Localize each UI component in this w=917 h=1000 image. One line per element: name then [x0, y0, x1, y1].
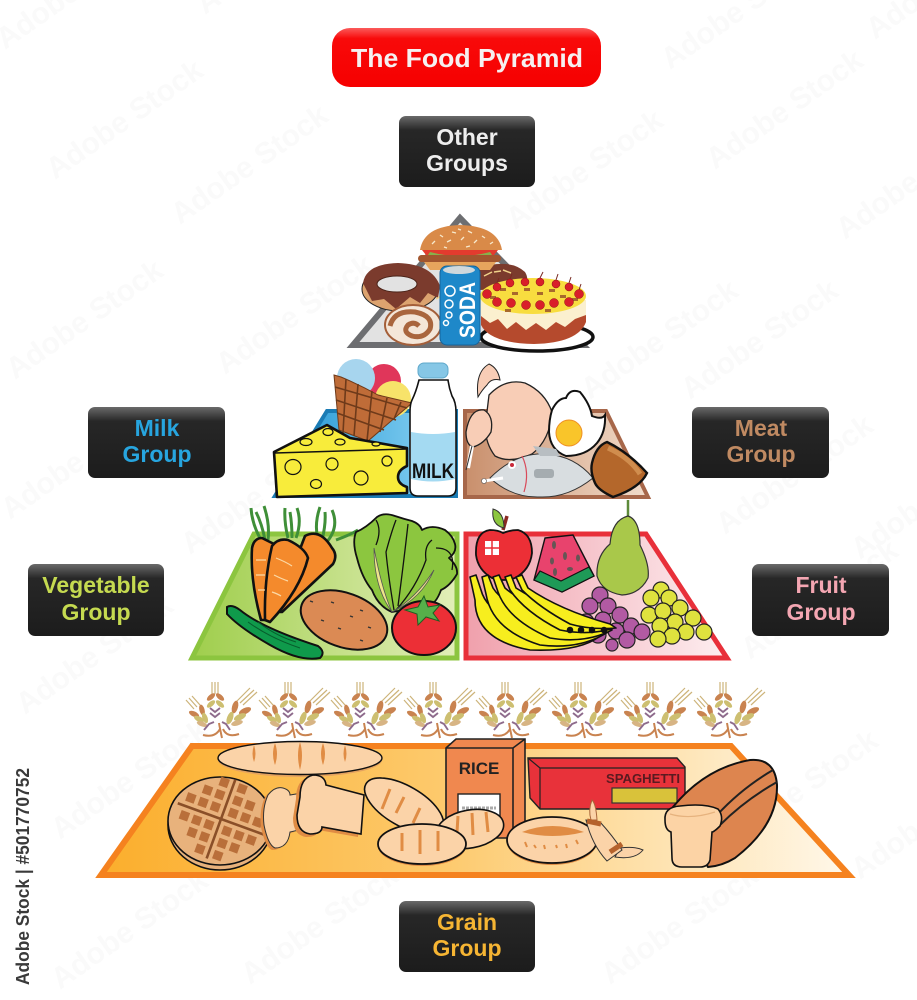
label: meat group: Meat — [735, 415, 788, 441]
stock watermark pattern: Adobe Stock — [45, 863, 214, 996]
panel: grain group — [101, 739, 849, 875]
label: milk group — [88, 407, 225, 478]
icon: rice box — [446, 739, 525, 838]
stock watermark pattern: Adobe Stock — [735, 533, 904, 666]
stock watermark pattern: Adobe Stock — [500, 103, 669, 236]
icon: bananas — [470, 575, 616, 650]
icon: chocolate sprinkles — [436, 270, 511, 304]
icon: chocolate pastry — [478, 264, 527, 290]
title — [332, 28, 601, 87]
stock watermark pattern: Adobe Stock — [175, 428, 344, 561]
label: vegetable group: Group — [62, 599, 130, 625]
label: fruit group — [752, 564, 889, 636]
icon: soda can: SODA — [455, 282, 480, 338]
label: meat group — [692, 407, 829, 478]
title: The Food Pyramid — [351, 43, 583, 73]
icon: milk bottle: MILK — [412, 460, 454, 483]
label: grain group: Group — [432, 935, 502, 961]
icon: fish — [482, 446, 593, 497]
icon: ham — [591, 442, 647, 497]
icon: toast slices — [260, 775, 364, 850]
icon: roast chicken — [466, 364, 552, 470]
label: fruit group: Group — [786, 599, 856, 625]
icon: pear — [597, 500, 648, 595]
stock watermark pattern: Adobe Stock — [595, 858, 764, 991]
label: meat group: Group — [726, 441, 796, 467]
icon: lettuce — [354, 514, 457, 612]
icon: round bread — [507, 817, 597, 865]
icon: milk bottle — [410, 363, 456, 496]
icon: rice box: RICE — [459, 759, 499, 778]
icon: cheese wedge — [274, 425, 407, 497]
icon: sliced loaf — [665, 760, 777, 867]
icon: soda can — [440, 266, 480, 345]
icon: tomato — [392, 596, 456, 655]
label: vegetable group — [28, 564, 164, 636]
row of wheat icons — [186, 682, 765, 738]
panel: milk group — [274, 359, 456, 497]
stock watermark pattern: Adobe Stock — [675, 273, 844, 406]
icon: ice cream scoops — [337, 359, 411, 417]
label: milk group: Group — [122, 441, 192, 467]
stock watermark pattern: Adobe Stock — [235, 858, 404, 991]
stock watermark pattern: Adobe Stock — [40, 53, 209, 186]
icon: fried egg — [549, 391, 605, 456]
label: other groups — [399, 116, 535, 187]
panel: vegetable group — [192, 506, 457, 661]
stock watermark pattern: Adobe Stock — [165, 98, 334, 231]
panel: fruit group — [466, 500, 727, 658]
label: grain group: Grain — [437, 909, 497, 935]
icon: small bread rolls — [356, 767, 507, 866]
icon: waffle cone — [334, 375, 412, 441]
icon: carrots — [251, 506, 358, 622]
icon: potato — [292, 579, 396, 661]
stock image id: Adobe Stock | #501770752 — [13, 768, 33, 985]
panel: meat group — [465, 364, 648, 497]
icon: burger — [418, 225, 502, 270]
label: milk group: Milk — [135, 415, 180, 441]
stock watermark pattern: Adobe Stock — [710, 408, 879, 541]
icon: swiss roll — [385, 305, 441, 345]
icon: donut — [362, 263, 440, 311]
label: other groups: Other — [436, 124, 498, 150]
icon: yellow grapes — [641, 582, 712, 647]
stock watermark pattern: Adobe Stock — [10, 588, 179, 721]
label: fruit group: Fruit — [795, 572, 847, 598]
label: vegetable group: Vegetable — [42, 572, 150, 598]
stock watermark pattern: Adobe Stock — [715, 723, 884, 856]
stock watermark pattern: Adobe Stock — [210, 248, 379, 381]
stock watermark pattern: Adobe Stock — [575, 273, 744, 406]
icon: spaghetti box: SPAGHETTI — [606, 771, 680, 786]
icon: potato eyes — [310, 601, 371, 641]
label: other groups: Groups — [426, 150, 508, 176]
stock watermark pattern: Adobe Stock — [700, 43, 869, 176]
icon: apple — [476, 509, 532, 580]
icon: cake on plate — [480, 272, 593, 351]
icon: waffle — [163, 764, 279, 874]
icon: baguette — [218, 742, 382, 777]
panel: other groups pyramid tip — [353, 218, 593, 351]
icon: purple grapes — [578, 587, 650, 651]
icon: croissant — [586, 800, 643, 861]
icon: cucumber — [227, 606, 323, 659]
label: grain group — [399, 901, 535, 972]
icon: spaghetti box — [528, 758, 685, 809]
stock watermark pattern: Adobe Stock — [45, 713, 214, 846]
stock watermark pattern: Adobe Stock — [0, 253, 169, 386]
icon: watermelon slice — [534, 535, 594, 592]
